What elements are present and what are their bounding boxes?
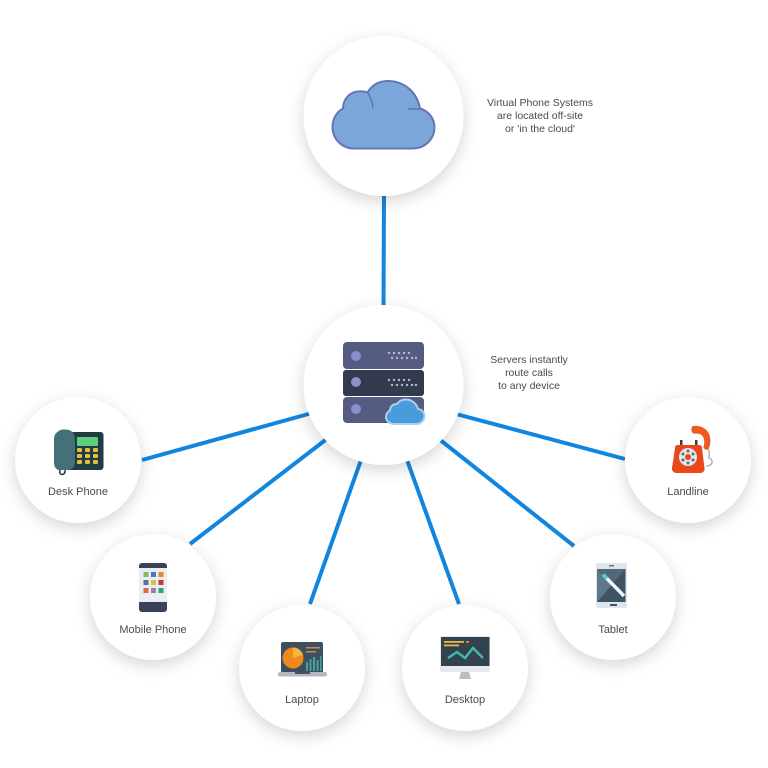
text: server description: Servers instantly (490, 354, 569, 366)
icon: landline (672, 426, 712, 473)
node: desktop (402, 605, 528, 731)
text: server description: to any device (498, 380, 560, 392)
text: cloud description: Virtual Phone Systems (487, 97, 593, 109)
label: landline: Landline (667, 486, 709, 498)
node: landline (625, 397, 751, 523)
icon: mobile phone (139, 563, 167, 612)
text: cloud description (487, 97, 593, 135)
connector lines (142, 190, 625, 604)
node: tablet (550, 534, 676, 660)
node: mobile phone (90, 534, 216, 660)
icon: tablet (596, 563, 627, 608)
text: server description (490, 354, 569, 392)
icon: server stack (343, 342, 424, 424)
icon: cloud (332, 81, 434, 148)
icon: desktop (440, 636, 490, 679)
label: laptop: Laptop (285, 694, 319, 706)
label: tablet: Tablet (598, 624, 628, 636)
label: desktop: Desktop (445, 694, 485, 706)
label: mobile phone: Mobile Phone (119, 624, 187, 636)
node: laptop (239, 605, 365, 731)
icon: small cloud (386, 400, 424, 424)
node: servers (304, 305, 464, 465)
node: desk phone (15, 397, 141, 523)
text: server description: route calls (505, 367, 553, 379)
node: cloud (304, 36, 464, 196)
icon: desk phone (54, 430, 104, 474)
text: cloud description: are located off-site (497, 110, 583, 122)
text: cloud description: or 'in the cloud' (505, 123, 575, 135)
icon: laptop (278, 642, 327, 676)
label: desk phone: Desk Phone (48, 486, 108, 498)
